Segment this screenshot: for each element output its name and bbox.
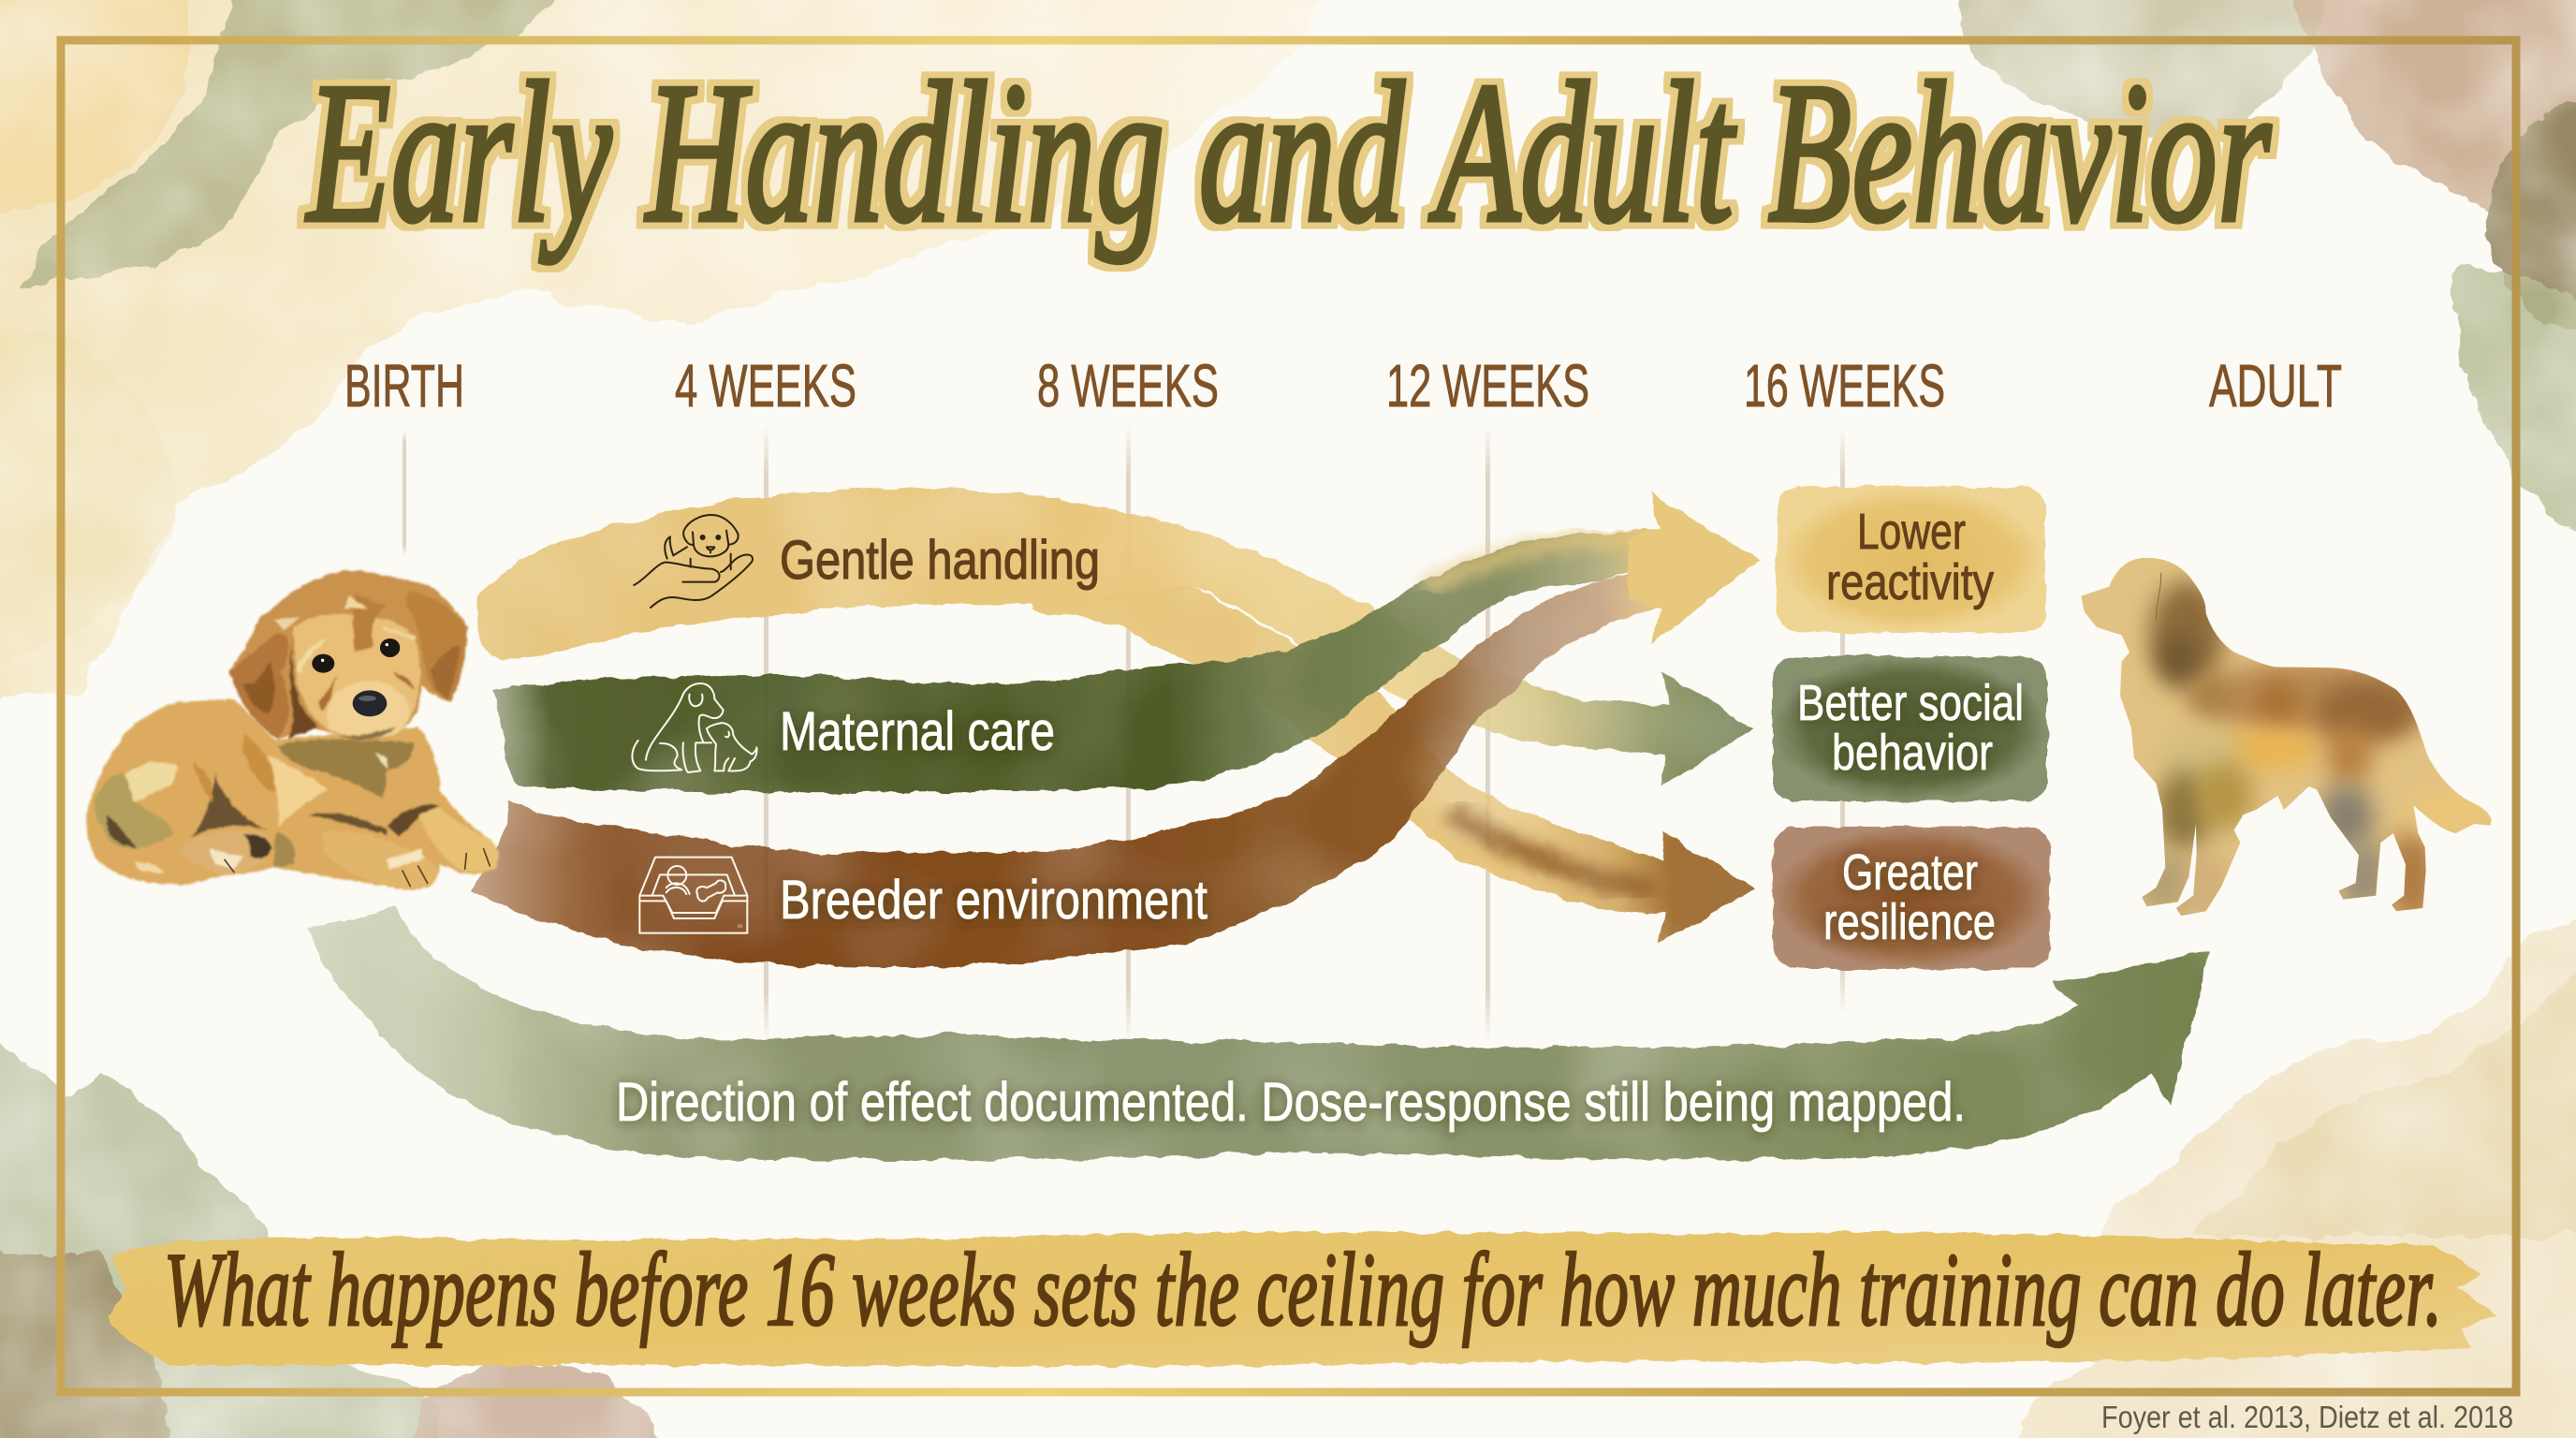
- ribbon label: gentle handling: Gentle handling: [780, 530, 1100, 591]
- outcome box: better social behavior: Better social: [1797, 675, 2024, 731]
- adult dog silhouette: [2081, 558, 2492, 916]
- outcome box: lower reactivity: [1777, 487, 2046, 633]
- ribbon label: breeder environment: Breeder environment: [780, 870, 1208, 931]
- icon: mother dog and puppy: [632, 683, 757, 772]
- watercolor wash: bottom left: [0, 1030, 683, 1438]
- icon: whelping box: 16: [738, 923, 742, 929]
- label: 12 weeks: 12 WEEKS: [1386, 352, 1589, 419]
- outcome box: greater resilience: Greater: [1842, 844, 1978, 901]
- icon: whelping box: [639, 858, 747, 933]
- puppy illustration: [86, 571, 499, 889]
- label: adult: ADULT: [2209, 352, 2342, 419]
- icon: hand holding puppy: [634, 515, 753, 608]
- caveat text: Direction of effect documented. Dose-response still being mapped.: [616, 1072, 1966, 1133]
- label: 8 weeks: 8 WEEKS: [1037, 352, 1219, 419]
- outcome box: better social behavior: behavior: [1832, 725, 1993, 781]
- watercolor wash: top right: [1956, 0, 2576, 552]
- arrowhead: lower reactivity: [1629, 492, 1759, 644]
- ribbon: breeder environment: [473, 569, 1662, 967]
- ribbon label: maternal care: Maternal care: [780, 701, 1055, 762]
- long olive arrow with caveat: [308, 909, 2209, 1160]
- outcome box: better social behavior: [1773, 656, 2048, 801]
- watercolor wash: top left: [0, 0, 1329, 712]
- watercolor wash: bottom right: [1994, 899, 2576, 1438]
- ribbon: gentle handling, lower branch to brown arrow: [1030, 587, 1752, 944]
- label: 4 weeks: 4 WEEKS: [675, 352, 856, 419]
- source citation: Foyer et al. 2013, Dietz et al. 2018: [2101, 1400, 2513, 1434]
- takeaway banner: [109, 1232, 2497, 1366]
- ribbon: gentle handling, upper branch to green arrow: [476, 488, 1754, 787]
- outcome box: lower reactivity: reactivity: [1826, 554, 1994, 610]
- outcome box: lower reactivity: Lower: [1857, 504, 1966, 560]
- outcome box: greater resilience: [1773, 827, 2050, 969]
- outcome box: greater resilience: resilience: [1823, 894, 1996, 950]
- label: birth: BIRTH: [344, 352, 464, 419]
- ribbon: maternal care: [492, 529, 1662, 793]
- timeline labels: [344, 352, 2342, 419]
- label: 16 weeks: 16 WEEKS: [1744, 352, 1945, 419]
